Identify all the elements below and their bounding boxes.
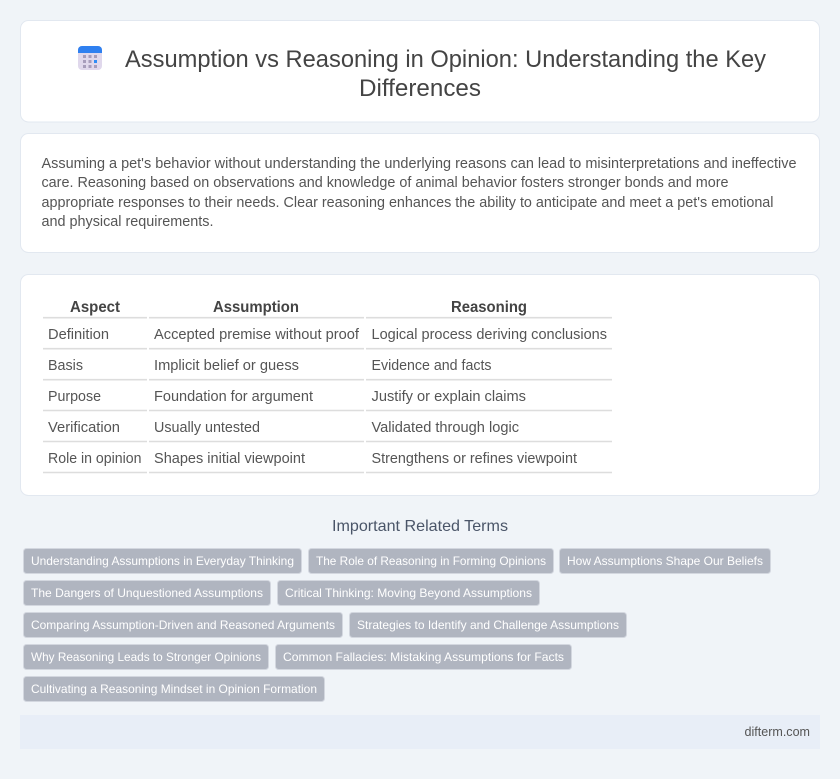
text block: intro: Assuming a pet's behavior without understanding the underlying reasons can lead to misinterpretations and ineffective xyxy=(42,156,796,172)
tag: Strategies to Identify and Challenge Assumptions xyxy=(357,618,619,632)
icon: calendar xyxy=(78,46,102,70)
text block: intro: and physical requirements. xyxy=(42,214,214,230)
title: Assumption vs Reasoning in Opinion: Understanding the Key xyxy=(125,46,767,73)
table header: Aspect xyxy=(70,299,121,316)
row: verification xyxy=(48,420,519,436)
tag: Why Reasoning Leads to Stronger Opinions xyxy=(31,650,261,664)
text block: intro: appropriate responses to their needs. Clear reasoning enhances the ability to anticipate and meet a pet's emotional xyxy=(42,195,774,211)
panel: intro paragraph xyxy=(20,134,820,252)
row: role in opinion: Shapes initial viewpoint xyxy=(154,451,305,467)
row: verification: Usually untested xyxy=(154,420,260,436)
row: purpose: Foundation for argument xyxy=(154,389,313,405)
tag xyxy=(24,676,324,702)
table header: Assumption xyxy=(213,299,299,316)
tag: Critical Thinking: Moving Beyond Assumptions xyxy=(285,586,532,600)
row: purpose: Justify or explain claims xyxy=(372,389,526,405)
row: definition: Accepted premise without proof xyxy=(154,327,360,343)
row: definition: Definition xyxy=(48,327,109,343)
row: definition xyxy=(48,327,607,343)
row: verification: Verification xyxy=(48,420,120,436)
tag: Understanding Assumptions in Everyday Thinking xyxy=(31,554,294,568)
row: purpose: Purpose xyxy=(48,389,101,405)
title xyxy=(125,46,767,102)
tag xyxy=(24,644,268,670)
text block: intro: care. Reasoning based on observations and knowledge of animal behavior fosters stronger bonds and more xyxy=(42,175,728,191)
tag: The Role of Reasoning in Forming Opinions xyxy=(316,554,546,568)
tag: The Dangers of Unquestioned Assumptions xyxy=(31,586,263,600)
row: role in opinion: Strengthens or refines viewpoint xyxy=(372,451,577,467)
row: role in opinion: Role in opinion xyxy=(48,451,142,467)
heading: related terms: Important Related Terms xyxy=(332,518,508,535)
table header xyxy=(70,299,527,316)
tag: Common Fallacies: Mistaking Assumptions for Facts xyxy=(283,650,564,664)
row: purpose xyxy=(48,389,526,405)
row: role in opinion xyxy=(48,451,577,467)
tag xyxy=(350,612,626,638)
row: basis: Implicit belief or guess xyxy=(154,358,299,374)
footer xyxy=(20,715,820,749)
row: basis xyxy=(48,358,492,374)
tag xyxy=(278,580,540,606)
related terms tags xyxy=(24,548,770,702)
text block: intro xyxy=(42,156,796,230)
tag xyxy=(560,548,770,574)
panel: header xyxy=(20,20,820,122)
tag xyxy=(24,612,342,638)
tag: Cultivating a Reasoning Mindset in Opinion Formation xyxy=(31,682,317,696)
table header: Reasoning xyxy=(451,299,527,316)
row: definition: Logical process deriving conclusions xyxy=(372,327,607,343)
row: verification: Validated through logic xyxy=(372,420,519,436)
tag: How Assumptions Shape Our Beliefs xyxy=(567,554,763,568)
title: Differences xyxy=(359,75,481,102)
panel: comparison table xyxy=(20,274,820,496)
tag: Comparing Assumption-Driven and Reasoned Arguments xyxy=(31,618,335,632)
row: basis: Evidence and facts xyxy=(372,358,492,374)
table grid xyxy=(43,318,612,472)
footer site name: difterm.com xyxy=(744,724,810,739)
tag xyxy=(276,644,572,670)
tag xyxy=(308,548,554,574)
row: basis: Basis xyxy=(48,358,83,374)
tag xyxy=(24,548,302,574)
tag xyxy=(24,580,270,606)
